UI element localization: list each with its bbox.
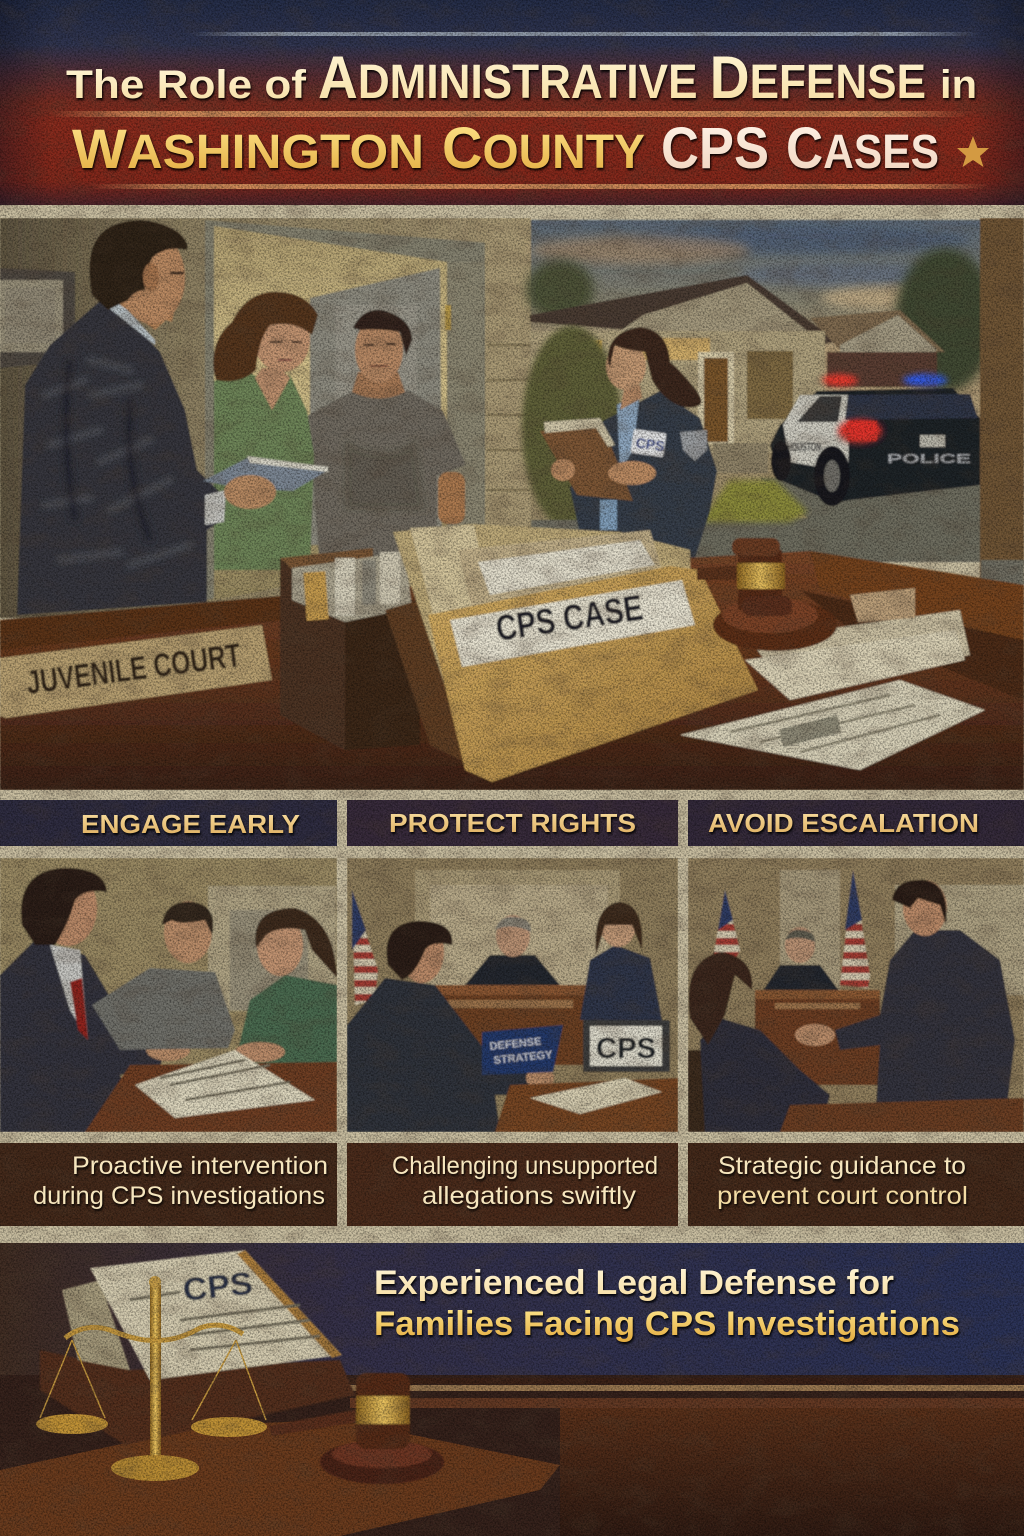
woman [235, 908, 337, 1068]
police car [770, 374, 980, 506]
table [495, 1078, 678, 1132]
nameplate: Juvenile Court: JUVENILE COURT [24, 636, 243, 701]
heading: protect rights: PROTECT RIGHTS [389, 808, 636, 838]
CPS officer: CPS [635, 434, 666, 454]
heading bar backgrounds [0, 800, 1024, 846]
house [530, 275, 837, 345]
panel: engage early scene [0, 858, 337, 1132]
CPS case folder: CPS CASE [493, 586, 646, 649]
file box [280, 548, 420, 750]
CPS book [40, 1250, 355, 1445]
title [66, 44, 977, 181]
lawyer with book [17, 220, 328, 615]
title: COUNTY [442, 116, 645, 181]
judge [465, 915, 560, 985]
banner text: Experienced Legal Defense for [374, 1264, 894, 1302]
monitor [583, 1020, 670, 1072]
panel: bottom banner [0, 1243, 1024, 1536]
table and documents [85, 1050, 337, 1132]
man in grey shirt [308, 310, 466, 570]
lawyer [0, 868, 190, 1132]
office wall and doorway [0, 218, 531, 618]
panel: protect rights scene [347, 858, 678, 1132]
title: WASHINGTON [72, 117, 424, 180]
header band [0, 0, 1024, 205]
caption: protect rights: Challenging unsupported [392, 1152, 658, 1180]
caption: protect rights: allegations swiftly [422, 1182, 637, 1210]
title: The Role of [66, 63, 307, 107]
monitor: CPS [596, 1033, 656, 1065]
man [92, 901, 235, 1050]
divider stripe below main scene [0, 790, 1024, 800]
flags [713, 870, 870, 988]
heading: avoid escalation: AVOID ESCALATION [708, 808, 979, 838]
caption: avoid escalation: Strategic guidance to [718, 1152, 966, 1180]
title: CASES [786, 116, 939, 181]
lawyer [795, 880, 1015, 1122]
CPS book: CPS [181, 1265, 254, 1308]
caption: engage early: Proactive intervention [72, 1152, 328, 1180]
desk [0, 551, 1024, 790]
CPS officer [540, 327, 717, 558]
panel: avoid escalation scene [688, 858, 1024, 1132]
icon: star [957, 136, 989, 167]
panel: main scene [0, 218, 1024, 790]
woman in green [213, 292, 318, 570]
book [482, 1025, 563, 1075]
gavel [697, 538, 837, 651]
officer [580, 902, 662, 1020]
caption: avoid escalation [717, 1152, 968, 1210]
caption: engage early: during CPS investigations [33, 1182, 325, 1210]
title: in [940, 63, 977, 107]
book: STRATEGY [493, 1049, 554, 1067]
banner text [374, 1264, 960, 1343]
police car: HOUSTON [787, 440, 821, 454]
caption: engage early [33, 1152, 328, 1210]
nameplate: Juvenile Court [0, 625, 272, 718]
caption: avoid escalation: prevent court control [717, 1182, 968, 1210]
caption: protect rights [392, 1152, 658, 1210]
bottom desk background [0, 1375, 1024, 1536]
right wall [980, 218, 1024, 583]
bench [755, 990, 880, 1085]
title: ADMINISTRATIVE DEFENSE [318, 44, 926, 111]
police car: POLICE [887, 451, 972, 466]
heading: engage early: ENGAGE EARLY [81, 809, 300, 839]
banner text: Families Facing CPS Investigations [374, 1305, 960, 1343]
stripe between scenes and captions [0, 1132, 1024, 1143]
gavel [268, 1373, 444, 1484]
bench [428, 985, 593, 1065]
caption backgrounds [0, 1143, 1024, 1226]
outdoor view [522, 220, 995, 562]
lawyer [347, 921, 554, 1132]
judge [762, 927, 840, 992]
CPS case folder [385, 524, 758, 782]
book: DEFENSE [489, 1036, 542, 1053]
title: CPS [661, 116, 769, 181]
icon: scales of justice [36, 1276, 267, 1481]
table [780, 1098, 1024, 1132]
woman seated [688, 952, 830, 1132]
flag [352, 890, 378, 1005]
papers [680, 588, 985, 770]
